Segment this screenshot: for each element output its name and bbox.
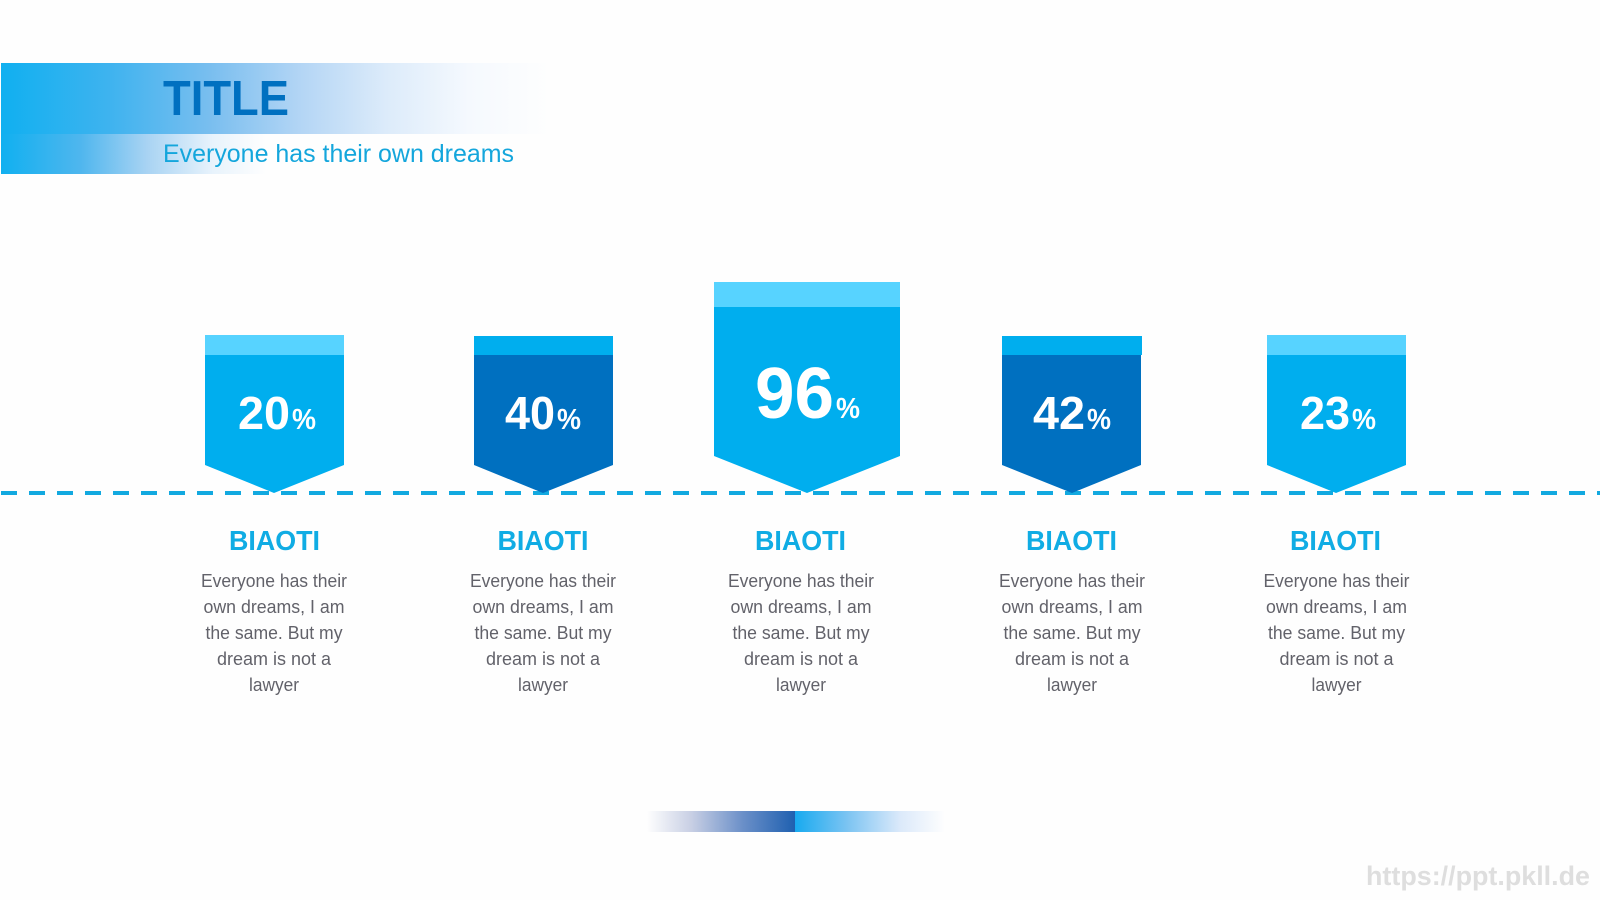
column 3 text xyxy=(728,525,874,695)
column 5 text xyxy=(1264,525,1410,695)
column 1 text: BIAOTI xyxy=(229,525,320,556)
value: 20%: % xyxy=(292,404,316,436)
pin: 96% xyxy=(714,282,900,493)
column 1 text: dream is not a xyxy=(217,649,332,669)
column 4 text: own dreams, I am xyxy=(1002,597,1142,617)
column 1 text xyxy=(201,525,347,695)
column 1 text: own dreams, I am xyxy=(204,597,344,617)
value: 96%: % xyxy=(836,393,860,425)
column 4 text: BIAOTI xyxy=(1026,525,1117,556)
column 2 text: lawyer xyxy=(518,675,568,695)
value: 96%: 96 xyxy=(755,354,834,434)
column 2 text: BIAOTI xyxy=(498,525,588,556)
title: TITLE xyxy=(163,72,289,126)
title banner xyxy=(1,63,551,174)
value: 42%: 42 xyxy=(1033,387,1085,439)
value: 20%: 20 xyxy=(238,387,290,439)
column 1 text: lawyer xyxy=(249,675,299,695)
column 3 text: lawyer xyxy=(776,675,826,695)
column 5 text: the same. But my xyxy=(1268,623,1405,643)
value: 42%: % xyxy=(1087,404,1111,436)
column 4 text: Everyone has their xyxy=(999,571,1145,591)
column 5 text: Everyone has their xyxy=(1264,571,1410,591)
column 4 text: the same. But my xyxy=(1004,623,1140,643)
column 5 text: dream is not a xyxy=(1280,649,1394,669)
column 1 text: Everyone has their xyxy=(201,571,347,591)
column 2 text: the same. But my xyxy=(474,623,612,643)
column 5 text: lawyer xyxy=(1312,675,1362,695)
column 2 text: dream is not a xyxy=(486,649,601,669)
column 3 text: own dreams, I am xyxy=(730,597,872,617)
footer gradient bar xyxy=(647,811,945,832)
column 4 text: dream is not a xyxy=(1015,649,1130,669)
watermark: https://ppt.pkll.de xyxy=(1366,861,1590,891)
dashed baseline xyxy=(1,491,1600,495)
column 5 text: own dreams, I am xyxy=(1266,597,1407,617)
value: 40%: % xyxy=(557,404,581,436)
column 2 text: Everyone has their xyxy=(470,571,616,591)
column 3 text: the same. But my xyxy=(732,623,870,643)
column 3 text: Everyone has their xyxy=(728,571,874,591)
column 4 text: lawyer xyxy=(1047,675,1097,695)
column 3 text: dream is not a xyxy=(744,649,859,669)
value: 40%: 40 xyxy=(505,387,555,439)
column 1 text: the same. But my xyxy=(206,623,342,643)
column 4 text xyxy=(999,525,1145,695)
column 2 text xyxy=(470,525,616,695)
pin: 23% xyxy=(1267,335,1406,493)
subtitle: Everyone has their own dreams xyxy=(163,140,514,168)
column 2 text: own dreams, I am xyxy=(472,597,614,617)
value: 23%: 23 xyxy=(1300,387,1350,439)
column 3 text: BIAOTI xyxy=(755,525,846,556)
value: 23%: % xyxy=(1352,404,1376,436)
pin: 40% xyxy=(474,336,613,493)
pin: 20% xyxy=(205,335,344,493)
pin: 42% xyxy=(1002,336,1142,493)
column 5 text: BIAOTI xyxy=(1290,525,1381,556)
